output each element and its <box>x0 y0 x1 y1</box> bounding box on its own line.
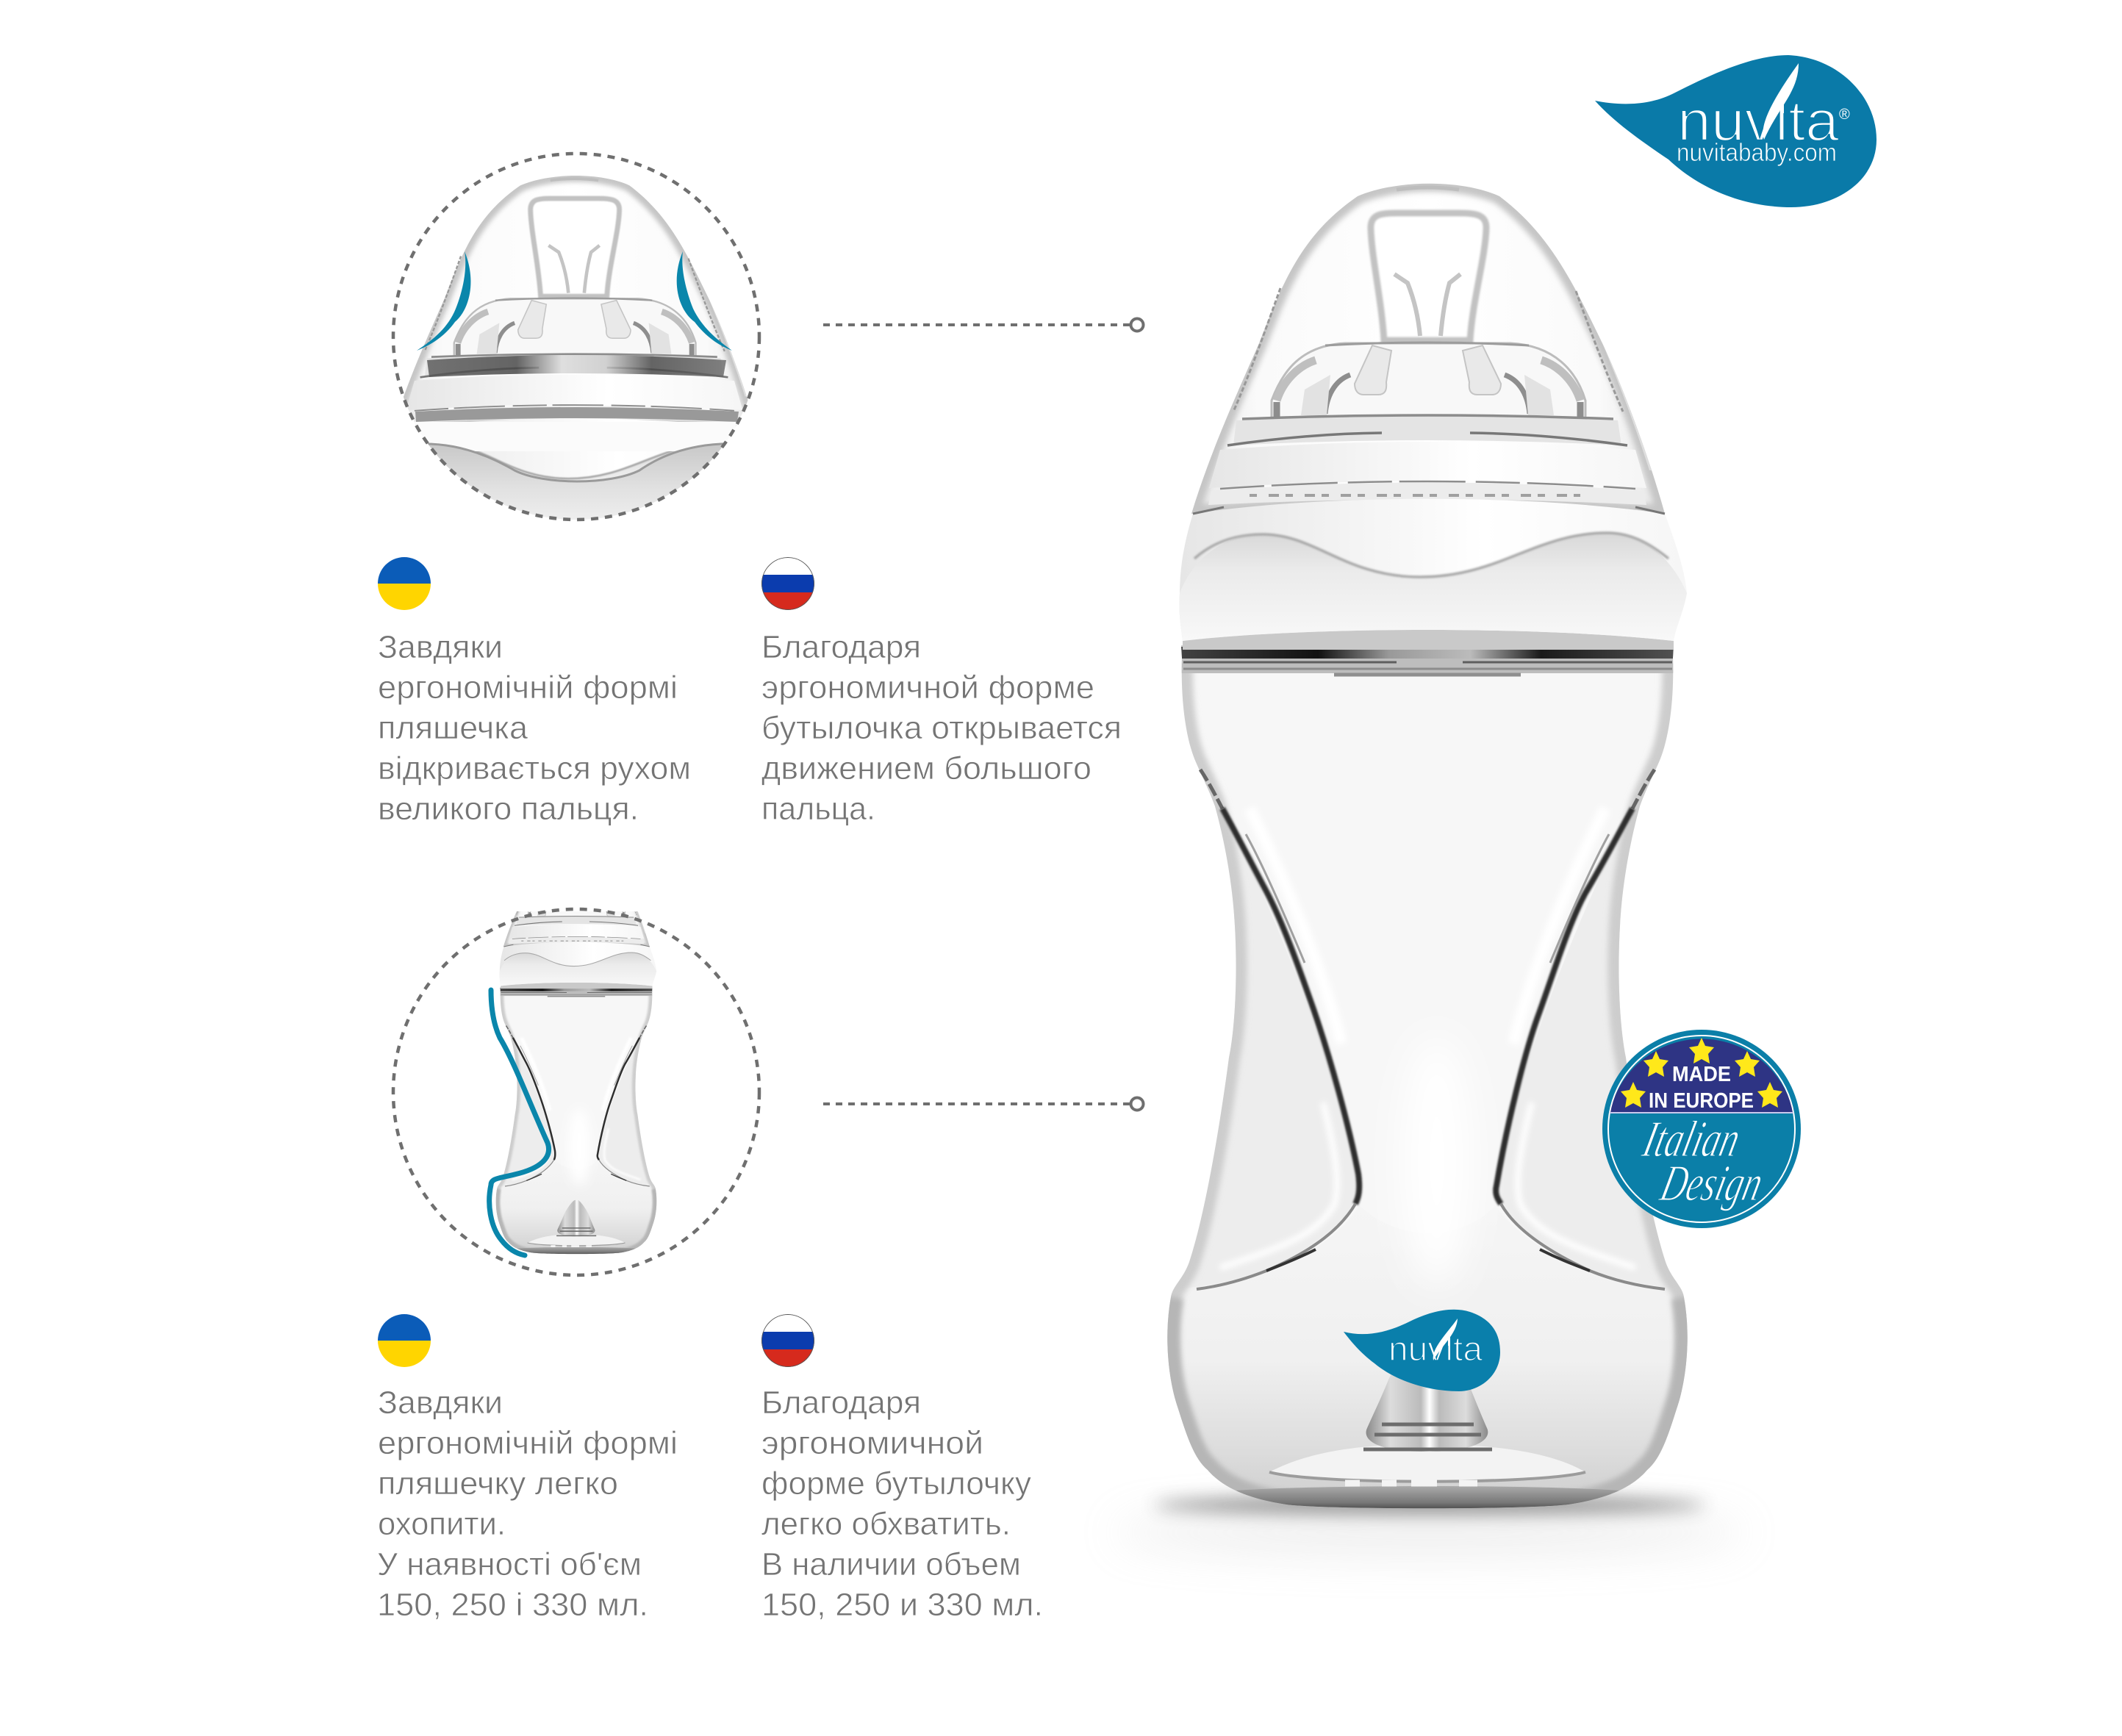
text: Russian description 2: В наличии объем <box>761 1546 1021 1582</box>
badge: made in Europe / Italian design: Design <box>1655 1155 1768 1212</box>
text: Ukrainian description 2: У наявності об'єм <box>377 1546 642 1582</box>
badge: made in Europe / Italian design: IN EUROPE <box>1649 1089 1754 1113</box>
text: Ukrainian description 1: Завдяки <box>378 629 503 665</box>
connector line bottom <box>823 1098 1144 1110</box>
text: Russian description 1: Благодаря <box>761 629 921 665</box>
panel: bottle grip detail circle <box>391 907 761 1277</box>
text: Russian description 2: форме бутылочку <box>761 1466 1031 1502</box>
icon: nuvita logo on bottle: nuvita <box>1388 1330 1483 1368</box>
text: Ukrainian description 2: Завдяки <box>378 1385 503 1421</box>
text: Ukrainian description 1: великого пальця. <box>378 791 639 827</box>
badge: made in Europe / Italian design: MADE <box>1672 1063 1731 1086</box>
text: Russian description 2: Благодаря <box>761 1385 921 1421</box>
text: Russian description 2: 150, 250 и 330 мл. <box>761 1587 1043 1623</box>
text: Ukrainian description 2: ергономічній формі <box>378 1425 678 1461</box>
logo: nuvita top right: nuvitababy.com <box>1677 139 1837 167</box>
main bottle <box>1167 184 1691 1514</box>
text: Ukrainian description 1: ергономічній формі <box>378 670 678 706</box>
teal grip line <box>490 990 549 1255</box>
logo: nuvita top right <box>1595 55 1877 207</box>
text: Russian description 1: бутылочка открывается <box>761 710 1122 746</box>
icon: nuvita logo on bottle <box>1344 1310 1500 1391</box>
text: Ukrainian description 1 <box>378 629 691 827</box>
text: Ukrainian description 2 <box>377 1385 678 1623</box>
text: Ukrainian description 2: 150, 250 і 330 мл. <box>377 1587 648 1623</box>
text: Russian description 2: эргономичной <box>761 1425 983 1461</box>
flag: Russia top <box>761 557 814 610</box>
text: Russian description 1: движением большого <box>761 750 1092 786</box>
text: Ukrainian description 2: охопити. <box>378 1506 506 1542</box>
text: Russian description 2 <box>761 1385 1043 1623</box>
logo: nuvita top right: ® <box>1839 107 1850 123</box>
flag: Ukraine bottom <box>378 1314 431 1367</box>
badge: made in Europe / Italian design: Italian <box>1637 1111 1746 1168</box>
text: Ukrainian description 2: пляшечку легко <box>378 1466 618 1502</box>
text: Russian description 1 <box>761 629 1122 827</box>
ground shadow <box>1114 1496 1746 1554</box>
flag: Russia bottom <box>761 1314 814 1367</box>
text: Russian description 1: пальца. <box>761 791 875 827</box>
teal arc right <box>677 251 732 351</box>
text: Ukrainian description 1: відкривається рухом <box>378 750 691 786</box>
text: Russian description 1: эргономичной форме <box>761 670 1094 706</box>
panel: cap detail circle <box>381 154 774 534</box>
teal arc left <box>417 251 470 351</box>
flag: Ukraine top <box>378 557 431 610</box>
text: Russian description 2: легко обхватить. <box>761 1506 1011 1542</box>
logo: nuvita top right: nuvita <box>1677 88 1840 153</box>
connector line top <box>823 319 1144 331</box>
badge: made in Europe / Italian design <box>1602 1030 1801 1228</box>
text: Ukrainian description 1: пляшечка <box>378 710 528 746</box>
